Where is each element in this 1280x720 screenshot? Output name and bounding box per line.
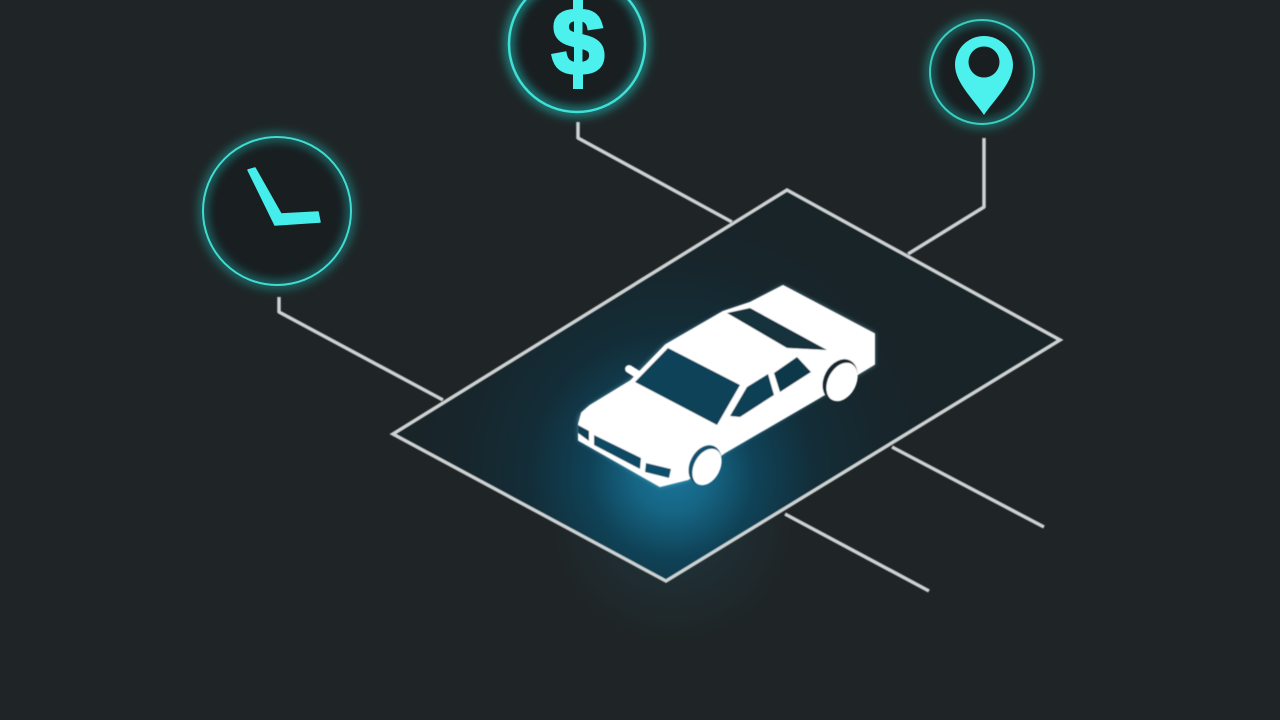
icon: dollar [509, 0, 645, 112]
parking plate [389, 188, 1064, 584]
right headlight [645, 463, 671, 478]
outer glow [552, 400, 792, 640]
car glow [578, 285, 875, 487]
left headlight [578, 425, 589, 441]
mirror [629, 369, 637, 374]
clock hands [248, 168, 320, 225]
windshield [635, 348, 740, 425]
pin [955, 36, 1013, 115]
icon: location pin [930, 20, 1034, 124]
front wheel [682, 439, 728, 491]
grille [594, 435, 641, 469]
rear wheel [816, 353, 864, 407]
icon: car [578, 285, 875, 491]
icon: clock [203, 137, 351, 285]
rear side window [774, 357, 811, 392]
front side window [730, 374, 774, 417]
rear window [727, 308, 827, 350]
car body [579, 286, 874, 486]
connector lines [279, 122, 1044, 591]
